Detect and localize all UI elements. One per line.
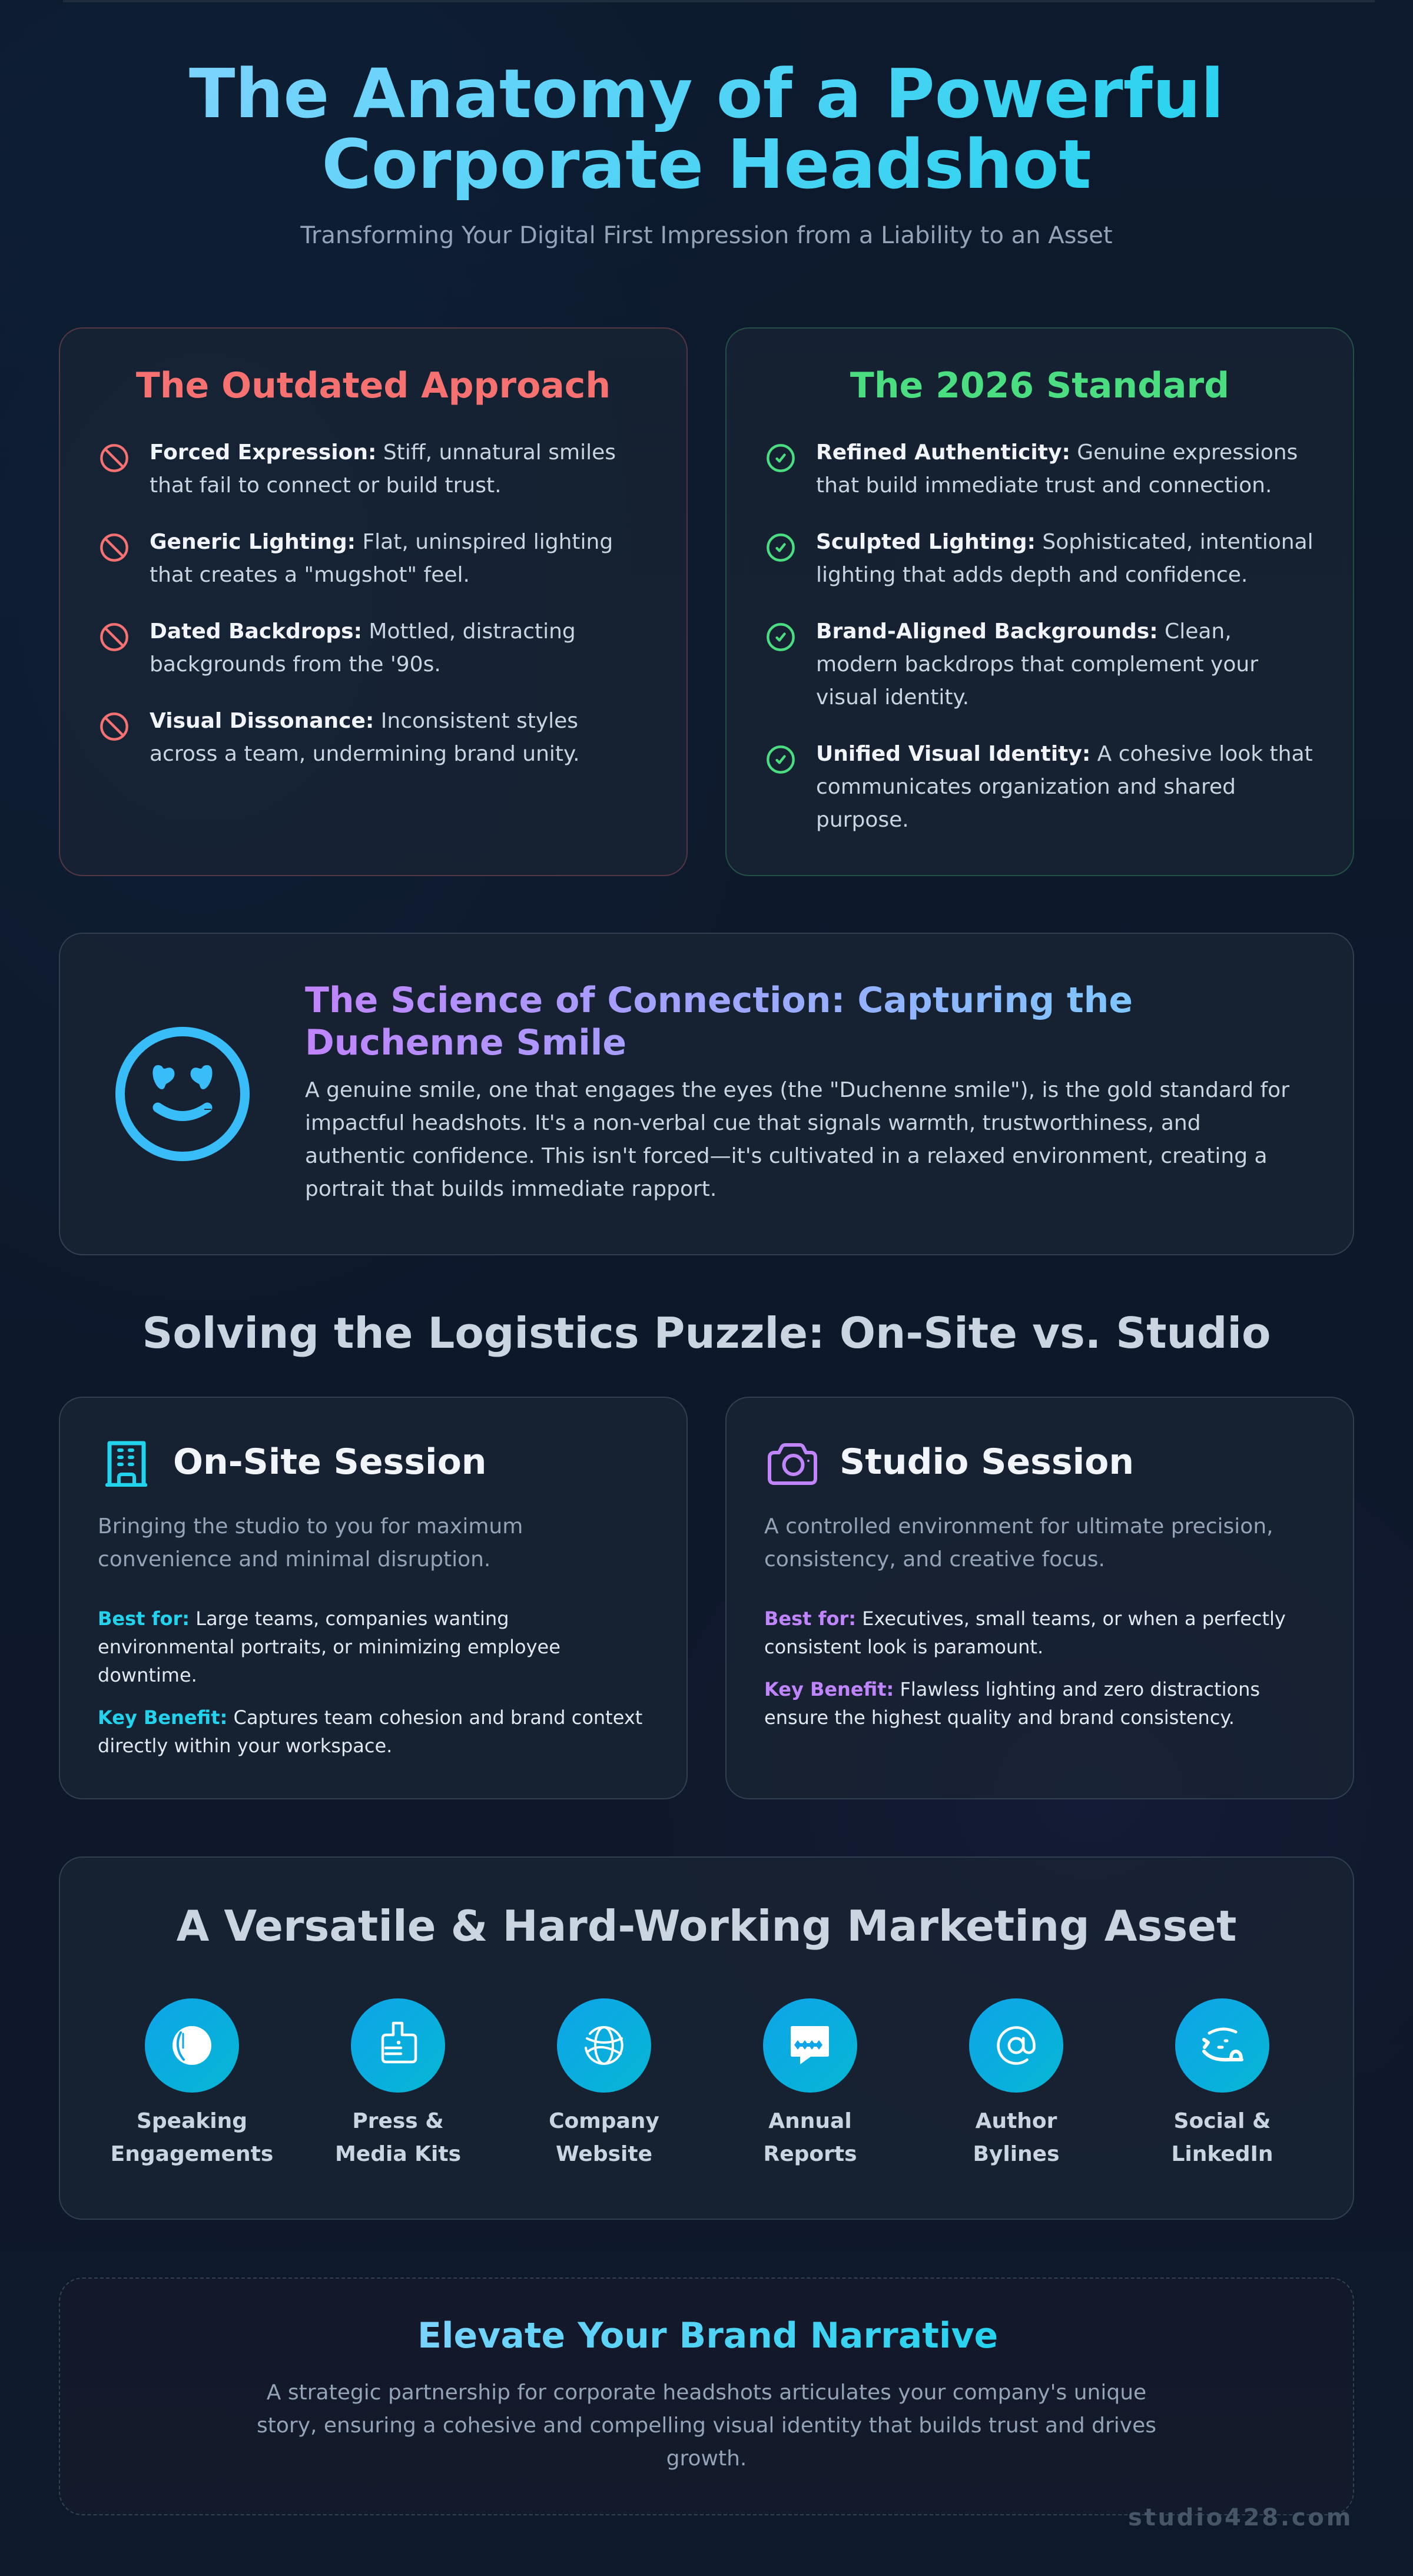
icon: social and linkedin <box>1175 1998 1269 2093</box>
text: forced expression: that fail to connect or build trust. <box>150 473 502 498</box>
label: press and media kits: Press & <box>352 2109 444 2133</box>
icon: speaking engagements <box>145 1998 239 2093</box>
label: speaking engagements: Engagements <box>111 2142 273 2166</box>
label: press and media kits <box>310 2105 486 2171</box>
panel: elevate your brand narrative <box>59 2277 1354 2515</box>
text: dated backdrops: Dated Backdrops: Mottled, distracting <box>150 619 576 644</box>
heading: solving the logistics puzzle: Solving the Logistics Puzzle: On-Site vs. Studio <box>142 1308 1271 1358</box>
text: sculpted lighting: lighting that adds depth and confidence. <box>816 563 1248 587</box>
heading: the science of connection <box>305 979 1159 1064</box>
text: closing paragraph <box>60 2376 1353 2475</box>
text: studio description <box>764 1514 1273 1572</box>
text: sculpted lighting: Sculpted Lighting: Sophisticated, intentional <box>816 530 1314 554</box>
text: unified visual identity: purpose. <box>816 808 909 832</box>
heading: the science of connection: Duchenne Smile <box>305 1022 626 1063</box>
heading: the science of connection: The Science of Connection: Capturing the <box>305 980 1133 1021</box>
text: brand-aligned backgrounds: modern backdrops that complement your <box>816 652 1258 677</box>
panel: the science of connection <box>59 933 1354 1255</box>
title: The Anatomy of a Powerful <box>189 55 1224 134</box>
top edge strip <box>63 0 1375 2</box>
text: duchenne explanation: authentic confidence. This isn't forced—it's cultivated in a relaxed environment, creating a <box>305 1144 1268 1168</box>
text: studio key benefit: Key Benefit: Flawless lighting and zero distractions <box>764 1678 1260 1700</box>
text: studio key benefit <box>764 1675 1260 1732</box>
text: on-site best for: environmental portraits, or minimizing employee <box>98 1636 560 1658</box>
icon: check <box>767 623 795 651</box>
icon: annual reports <box>763 1998 857 2093</box>
heading: versatile marketing asset: A Versatile & Hard-Working Marketing Asset <box>177 1901 1236 1951</box>
panel: marketing asset <box>59 1856 1354 2220</box>
text: closing paragraph: A strategic partnership for corporate headshots articulates your company's unique <box>267 2381 1146 2405</box>
icon: company website <box>557 1998 651 2093</box>
icon: check <box>767 533 795 562</box>
text: on-site key benefit <box>98 1706 642 1757</box>
text: unified visual identity <box>816 742 1313 832</box>
text: visual dissonance: across a team, undermining brand unity. <box>150 742 580 766</box>
text: refined authenticity <box>816 440 1298 498</box>
text: brand-aligned backgrounds <box>816 619 1259 710</box>
label: company website: Company <box>549 2109 659 2133</box>
text: unified visual identity: Unified Visual Identity: A cohesive look that <box>816 742 1313 766</box>
label: company website: Website <box>556 2142 652 2166</box>
heading: elevate your brand narrative: Elevate Your Brand Narrative <box>417 2315 998 2356</box>
panel: on-site session <box>59 1397 688 1799</box>
icon: ban <box>100 623 128 651</box>
text: duchenne explanation <box>305 1078 1289 1201</box>
heading: studio session: Studio Session <box>840 1441 1134 1483</box>
text: dated backdrops: backgrounds from the '90s. <box>150 652 441 677</box>
text: forced expression <box>150 440 616 498</box>
panel: studio session <box>725 1397 1354 1799</box>
title <box>189 59 1224 200</box>
label: author bylines: Author <box>976 2109 1057 2133</box>
icon: check <box>767 745 795 774</box>
label: social and linkedin: Social & <box>1174 2109 1271 2133</box>
label: speaking engagements: Speaking <box>137 2109 247 2133</box>
icon: ban <box>100 533 128 562</box>
label: speaking engagements <box>104 2105 280 2171</box>
text: studio best for <box>764 1607 1286 1658</box>
panel: the outdated approach <box>59 327 688 876</box>
text: unified visual identity: communicates organization and shared <box>816 775 1236 799</box>
text: duchenne explanation: portrait that builds immediate rapport. <box>305 1177 717 1201</box>
text: studio best for: consistent look is paramount. <box>764 1636 1043 1658</box>
text: closing paragraph: growth. <box>666 2446 747 2471</box>
text: studio description: consistency, and creative focus. <box>764 1547 1105 1572</box>
label: annual reports: Reports <box>763 2142 857 2166</box>
text: generic lighting <box>150 530 613 587</box>
subtitle: Transforming Your Digital First Impression from a Liability to an Asset <box>300 222 1113 249</box>
text: forced expression: Forced Expression: Stiff, unnatural smiles <box>150 440 616 465</box>
title: Corporate Headshot <box>321 125 1092 204</box>
text: refined authenticity: Refined Authenticity: Genuine expressions <box>816 440 1298 465</box>
watermark: studio428.com: studio428.com <box>1128 2504 1353 2531</box>
text: brand-aligned backgrounds: visual identity. <box>816 685 969 710</box>
icon: ban <box>100 712 128 741</box>
text: visual dissonance <box>150 709 580 766</box>
text: sculpted lighting <box>816 530 1314 587</box>
heading: on-site session: On-Site Session <box>173 1441 486 1483</box>
icon: check <box>767 444 795 472</box>
text: dated backdrops <box>150 619 576 677</box>
text: on-site description <box>98 1514 523 1572</box>
icon: author bylines <box>969 1998 1063 2093</box>
text: on-site key benefit: directly within your workspace. <box>98 1735 392 1757</box>
text: on-site best for <box>98 1607 560 1686</box>
text: studio description: A controlled environment for ultimate precision, <box>764 1514 1273 1539</box>
text: duchenne explanation: impactful headshots. It's a non-verbal cue that signals warmth, trustworthiness, and <box>305 1111 1201 1135</box>
label: company website <box>516 2105 692 2171</box>
icon: building <box>105 1441 147 1487</box>
icon: smiling face with heart eyes <box>115 1027 250 1161</box>
label: annual reports: Annual <box>768 2109 852 2133</box>
text: studio best for: Best for: Executives, small teams, or when a perfectly <box>764 1607 1286 1630</box>
text: duchenne explanation: A genuine smile, one that engages the eyes (the "Duchenne smile"), is the gold standard for <box>305 1078 1289 1102</box>
label: author bylines: Bylines <box>973 2142 1060 2166</box>
text: studio key benefit: ensure the highest quality and brand consistency. <box>764 1706 1235 1729</box>
label: social and linkedin: LinkedIn <box>1171 2142 1273 2166</box>
icon: camera <box>768 1443 817 1485</box>
icon: ban <box>100 444 128 472</box>
text: generic lighting: that creates a "mugshot" feel. <box>150 563 470 587</box>
label: annual reports <box>722 2105 898 2171</box>
text: brand-aligned backgrounds: Brand-Aligned Backgrounds: Clean, <box>816 619 1232 644</box>
label: press and media kits: Media Kits <box>335 2142 461 2166</box>
text: on-site description: convenience and minimal disruption. <box>98 1547 490 1572</box>
label: social and linkedin <box>1134 2105 1311 2171</box>
icon: press and media kits <box>351 1998 445 2093</box>
panel: the 2026 standard <box>725 327 1354 876</box>
text: on-site description: Bringing the studio to you for maximum <box>98 1514 523 1539</box>
text: closing paragraph: story, ensuring a cohesive and compelling visual identity that builds trust and drives <box>257 2413 1156 2438</box>
label: author bylines <box>928 2105 1104 2171</box>
heading: 2026 standard: The 2026 Standard <box>850 365 1229 406</box>
text: generic lighting: Generic Lighting: Flat, uninspired lighting <box>150 530 613 554</box>
text: on-site best for: Best for: Large teams, companies wanting <box>98 1607 509 1630</box>
text: on-site key benefit: Key Benefit: Captures team cohesion and brand context <box>98 1706 642 1729</box>
text: on-site best for: downtime. <box>98 1664 197 1686</box>
text: refined authenticity: that build immediate trust and connection. <box>816 473 1272 498</box>
heading: outdated approach: The Outdated Approach <box>136 365 611 406</box>
text: visual dissonance: Visual Dissonance: Inconsistent styles <box>150 709 578 733</box>
